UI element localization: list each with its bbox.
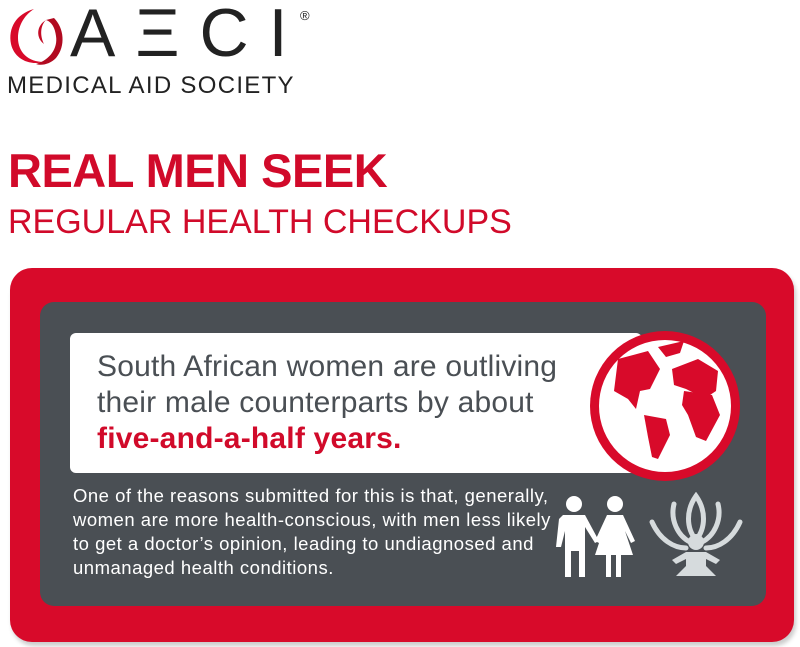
- icon: lotus meditation: [650, 492, 742, 576]
- callout: white box: their male counterparts by about: [97, 386, 534, 419]
- logo: [7, 0, 310, 99]
- title: [8, 144, 512, 241]
- icon: logo mark: [10, 9, 63, 65]
- icon: couple: [556, 496, 635, 577]
- callout: white box: five-and-a-half years.: [97, 422, 402, 455]
- callout: white box: South African women are outliving: [97, 350, 557, 383]
- text block: women are more health-conscious, with men less likely: [73, 509, 551, 530]
- text block: One of the reasons submitted for this is that, generally,: [73, 485, 548, 506]
- text block: to get a doctor’s opinion, leading to undiagnosed and: [73, 533, 534, 554]
- logo: ®: [300, 8, 310, 23]
- text block: [73, 485, 551, 578]
- title: REAL MEN SEEK: [8, 144, 387, 197]
- title: REGULAR HEALTH CHECKUPS: [8, 203, 512, 241]
- panel: red frame: [10, 268, 794, 642]
- callout: white box: [70, 333, 642, 473]
- icon: globe: [590, 331, 740, 481]
- panel: dark inner: [40, 302, 766, 606]
- text block: unmanaged health conditions.: [73, 557, 334, 578]
- logo subtitle: MEDICAL AID SOCIETY: [7, 72, 295, 99]
